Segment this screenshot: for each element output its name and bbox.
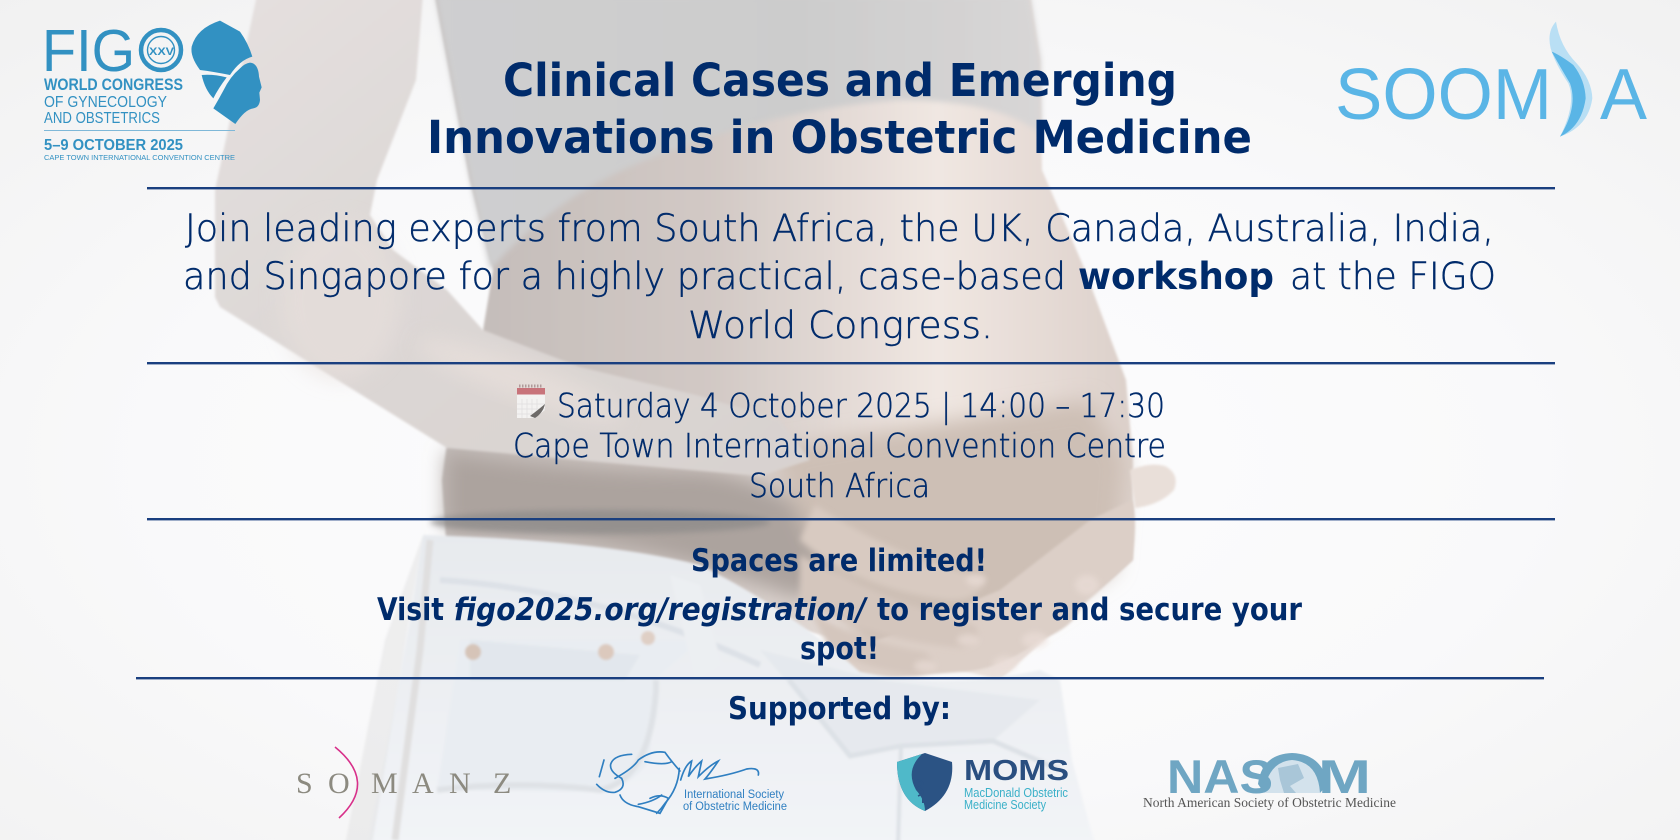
logo: FIGO World Congress: CAPE TOWN INTERNATIONAL CONVENTION CENTRE — [44, 153, 235, 162]
divider — [136, 677, 1544, 679]
logo: FIGO World Congress — [42, 18, 262, 162]
date and venue — [513, 386, 1166, 505]
divider — [147, 362, 1555, 364]
date and venue: Cape Town International Convention Centre — [513, 426, 1166, 465]
intro text block: at the FIGO — [1290, 255, 1496, 298]
registration call to action: Spaces are limited! — [691, 543, 987, 579]
intro text block: and Singapore for a highly practical, case-based — [183, 255, 1066, 298]
logo: NASOM — [1143, 750, 1396, 810]
registration call to action: figo2025.org/registration/ — [454, 592, 868, 628]
jeans — [345, 535, 1095, 840]
logo: NASOM: North American Society of Obstetric Medicine — [1143, 795, 1396, 810]
intro text block — [183, 207, 1496, 347]
intro text block: Join leading experts from South Africa, the UK, Canada, Australia, India, — [185, 207, 1494, 250]
torso and belly — [435, 0, 1133, 680]
tank top — [435, 0, 1042, 270]
logo: SOMANZ: SOMANZ — [296, 767, 511, 800]
registration call to action: spot! — [800, 631, 879, 667]
supported by heading: Supported by: — [728, 691, 951, 727]
intro text block: World Congress. — [688, 304, 993, 347]
logo: MOMS — [897, 753, 1069, 812]
hand with fingers — [830, 465, 1176, 680]
icon: FIGO head silhouette — [191, 21, 262, 124]
icon: calendar — [517, 386, 545, 418]
arm — [215, 0, 810, 476]
logo: NASOM: NAS — [1167, 750, 1273, 803]
registration call to action: to register and secure your — [877, 592, 1303, 628]
logo: FIGO World Congress: AND OBSTETRICS — [44, 110, 160, 127]
logo: MOMS: Medicine Society — [964, 798, 1047, 812]
logo: ISOM — [597, 752, 787, 813]
logo: SOMANZ — [296, 747, 511, 818]
logo: ISOM: of Obstetric Medicine — [683, 801, 787, 813]
logo: NASOM: M — [1318, 750, 1371, 803]
intro text block: workshop — [1078, 255, 1274, 298]
logo: ISOM: International Society — [684, 789, 784, 801]
title: Innovations in Obstetric Medicine — [427, 111, 1252, 164]
date and venue: Saturday 4 October 2025 | 14:00 – 17:30 — [557, 386, 1165, 425]
logo: SOOMA: SOOM — [1335, 55, 1552, 135]
registration call to action: Visit — [377, 592, 444, 628]
divider — [147, 187, 1555, 189]
logo: MOMS: MOMS — [964, 755, 1069, 787]
logo: MOMS: MacDonald Obstetric — [964, 786, 1068, 800]
registration call to action — [377, 543, 1303, 667]
title — [427, 54, 1252, 164]
divider — [147, 518, 1555, 520]
logo: FIGO World Congress: XXV — [149, 46, 175, 58]
logo: SOOMA — [1335, 22, 1647, 137]
title: Clinical Cases and Emerging — [503, 54, 1177, 107]
lower belly shadow — [446, 400, 1125, 660]
logo: FIGO World Congress: FIG — [42, 18, 135, 84]
date and venue: South Africa — [749, 466, 930, 505]
logo: SOOMA: A — [1600, 55, 1647, 135]
logo: FIGO World Congress: OF GYNECOLOGY — [44, 94, 167, 111]
logo: FIGO World Congress: WORLD CONGRESS — [44, 76, 183, 94]
logo: FIGO World Congress: 5–9 OCTOBER 2025 — [44, 137, 183, 154]
